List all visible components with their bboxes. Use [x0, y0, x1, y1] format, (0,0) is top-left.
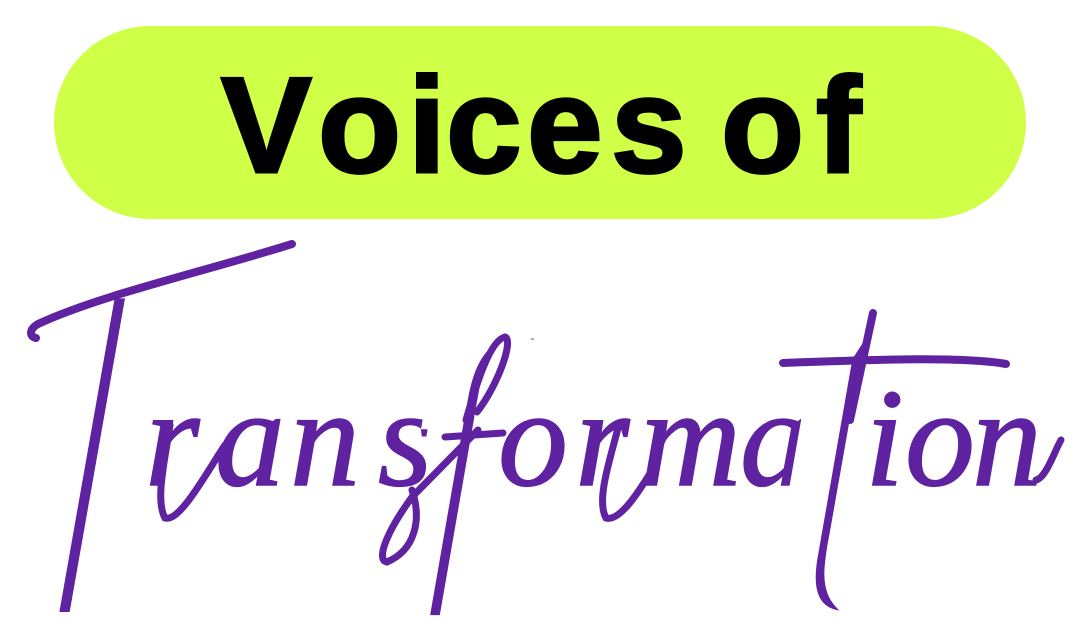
decorative swash: f crossbar, link and top loop	[412, 337, 508, 497]
title: Voices of: Voices of	[221, 49, 862, 201]
panel: lime title pill	[54, 26, 1026, 219]
heading: Transformation script: orma	[498, 361, 810, 516]
decorative swash: first r tail	[161, 425, 225, 518]
decorative swash: t crossbar and top extension	[783, 313, 1006, 420]
decorative swash: final n tail	[1036, 440, 1061, 480]
heading: Transformation script: f	[417, 271, 547, 625]
heading: Transformation script: rans	[145, 361, 432, 516]
decorative swash: flourish below s	[382, 490, 416, 562]
decorative swash: second r tail	[603, 428, 652, 518]
decorative swash: T crossbar	[31, 244, 292, 338]
heading: Transformation script: ion	[865, 361, 1042, 516]
